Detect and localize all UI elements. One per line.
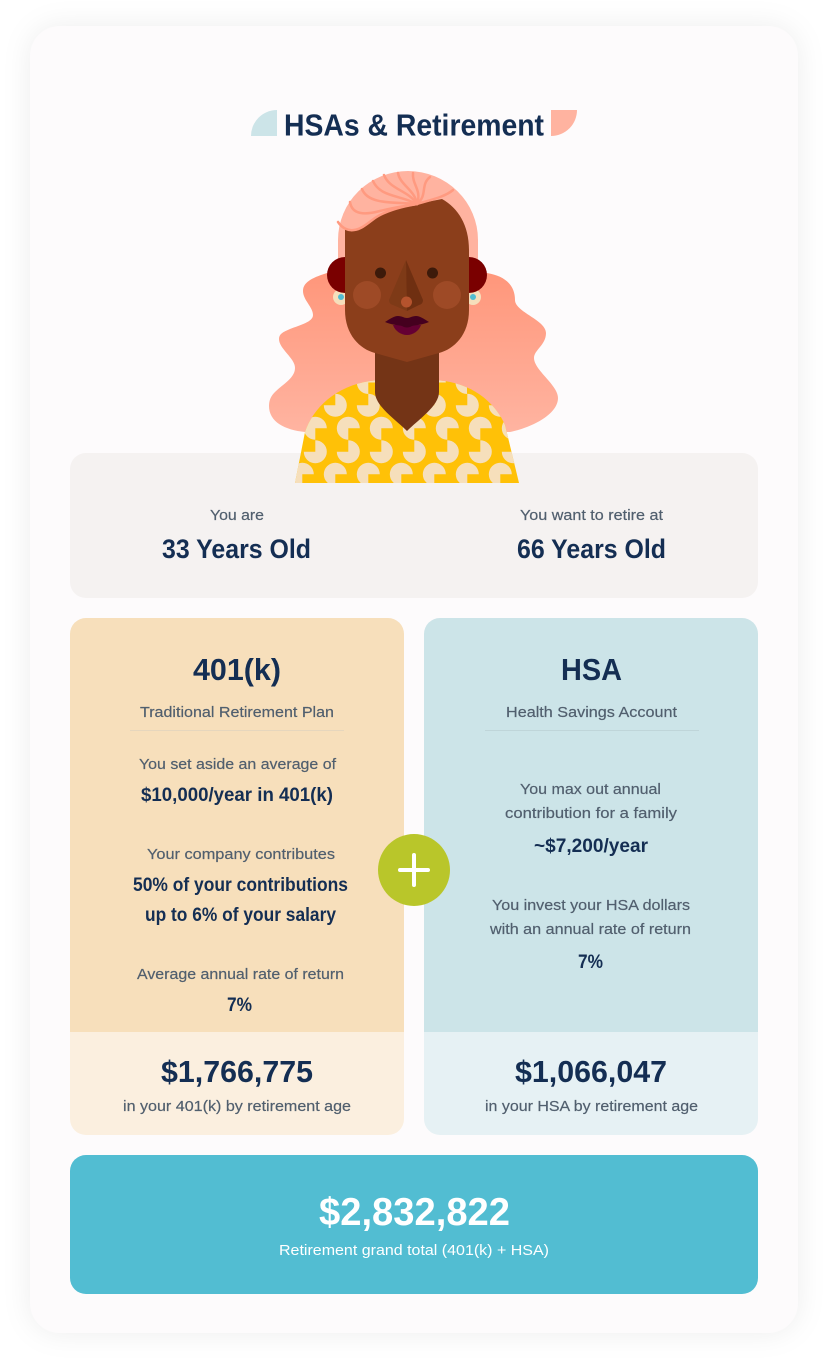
shirt bbox=[295, 380, 519, 483]
earrings bbox=[333, 289, 481, 305]
cheeks bbox=[353, 281, 461, 309]
head bbox=[345, 199, 469, 362]
retirement age label: You want to retire at bbox=[520, 507, 664, 524]
panel: 401(k) bbox=[70, 618, 404, 1135]
current age: 33 Years Old bbox=[162, 534, 311, 564]
grand total label: Retirement grand total (401(k) + HSA) bbox=[279, 1243, 549, 1259]
HSA rate of return: You invest your HSA dollars bbox=[492, 897, 690, 914]
HSA rate of return: 7% bbox=[578, 952, 603, 973]
neck bbox=[375, 340, 439, 431]
company match: up to 6% of your salary bbox=[145, 905, 336, 926]
illustration: woman portrait bbox=[269, 171, 558, 486]
HSA subtitle: Health Savings Account bbox=[506, 704, 678, 721]
icon: left quarter circle bbox=[251, 110, 277, 136]
company match: 50% of your contributions bbox=[133, 875, 348, 896]
nose bbox=[389, 260, 423, 311]
panel: age info bbox=[70, 453, 758, 598]
hair strands bbox=[338, 173, 453, 230]
eyes bbox=[375, 268, 438, 278]
lips bbox=[385, 316, 429, 335]
icon: right quarter circle bbox=[551, 110, 577, 136]
HSA total: in your HSA by retirement age bbox=[485, 1098, 698, 1115]
hair top arch bbox=[338, 171, 478, 265]
HSA rate of return bbox=[489, 897, 691, 973]
401(k) subtitle: Traditional Retirement Plan bbox=[140, 704, 334, 721]
401(k) rate of return: 7% bbox=[227, 995, 252, 1016]
HSA contribution: ~$7,200/year bbox=[534, 836, 649, 857]
401(k) contribution: You set aside an average of bbox=[139, 756, 337, 773]
401(k) contribution: $10,000/year in 401(k) bbox=[141, 785, 333, 806]
401(k) contribution bbox=[139, 756, 337, 806]
retirement age: 66 Years Old bbox=[517, 534, 666, 564]
HSA total: $1,066,047 bbox=[515, 1054, 667, 1089]
HSA contribution: contribution for a family bbox=[505, 805, 678, 822]
401(k) total: $1,766,775 bbox=[161, 1054, 313, 1089]
HSA contribution: You max out annual bbox=[520, 781, 661, 798]
401(k) total: in your 401(k) by retirement age bbox=[123, 1098, 351, 1115]
401(k) heading: 401(k) bbox=[193, 652, 281, 687]
icon: plus badge bbox=[378, 834, 450, 906]
401(k) rate of return: Average annual rate of return bbox=[137, 966, 344, 983]
title text: HSAs & Retirement bbox=[284, 108, 544, 142]
401(k) total bbox=[70, 1032, 404, 1135]
HSA contribution bbox=[505, 781, 678, 857]
hair back waves bbox=[269, 273, 558, 432]
401(k) rate of return bbox=[137, 966, 344, 1016]
panel: HSA bbox=[424, 618, 758, 1135]
company match: Your company contributes bbox=[147, 846, 335, 863]
current age label: You are bbox=[210, 507, 264, 524]
ears bbox=[327, 257, 487, 293]
company match bbox=[133, 846, 348, 926]
HSA heading: HSA bbox=[561, 652, 622, 687]
panel: grand total bbox=[70, 1155, 758, 1294]
HSA total bbox=[424, 1032, 758, 1135]
grand total amount: $2,832,822 bbox=[319, 1191, 510, 1234]
title bbox=[251, 108, 577, 142]
HSA rate of return: with an annual rate of return bbox=[489, 921, 691, 938]
